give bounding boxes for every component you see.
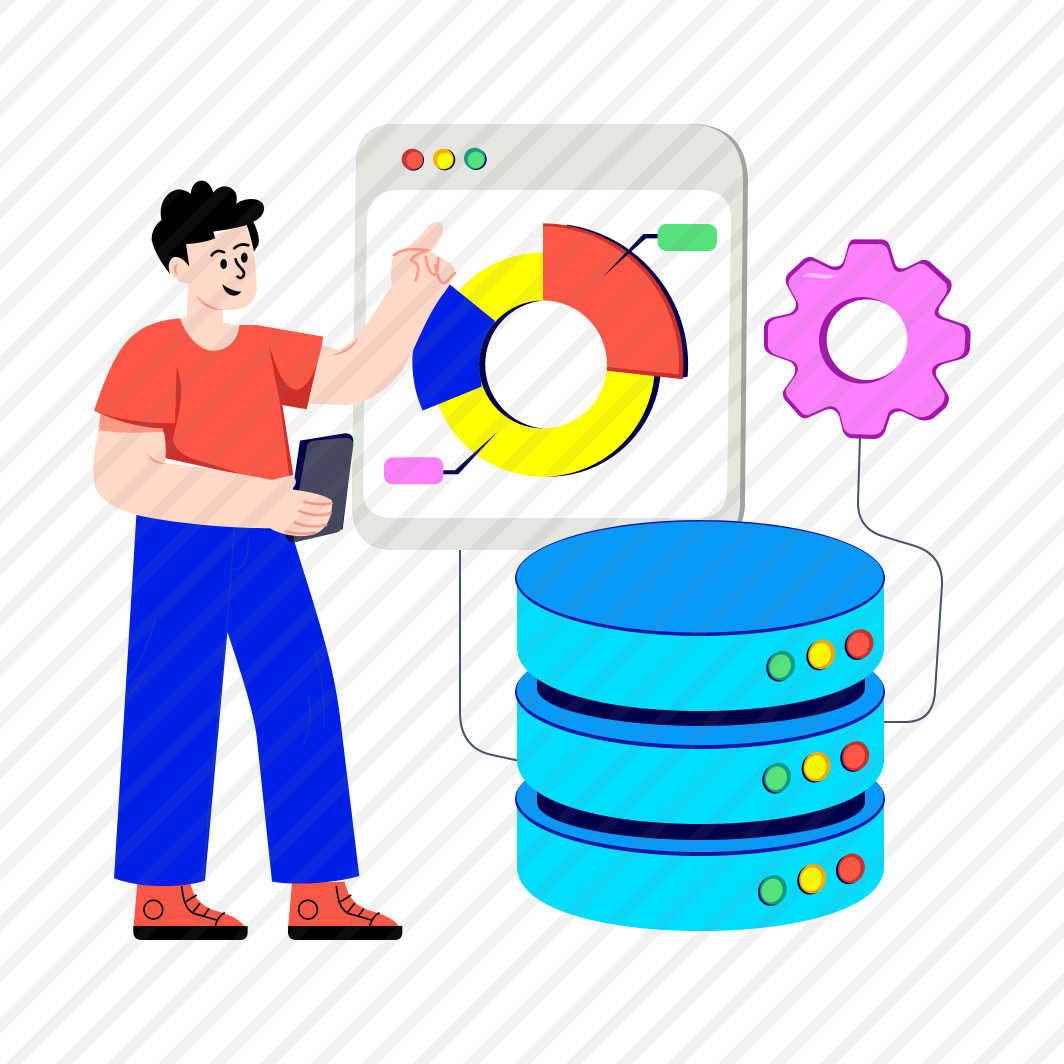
pink label leader [443,432,498,474]
middle tier gap [537,660,865,726]
bottom tier lights [754,849,869,910]
gear rim [764,239,971,439]
under-sleeve shade [98,412,167,434]
pants seams and creases [128,528,324,877]
server lights [754,625,878,910]
green label leader [603,234,658,277]
top tier top [516,522,884,632]
shirt shadow right [269,337,323,476]
top tier lights [762,625,878,686]
middle tier lights [758,737,873,798]
neck and face [168,225,257,351]
right shoe [288,882,402,940]
top tier rim [515,520,885,636]
neck shadow [196,295,223,310]
lower arm and hand [93,430,332,536]
face: brows, eyes, nose, mouth [212,244,248,296]
gear hole [827,299,907,380]
window frame [352,124,743,550]
gear highlight [802,273,838,278]
hair [152,181,264,275]
ear detail [174,263,178,276]
window content area [363,190,731,518]
icon: gear [764,239,971,439]
grip finger lines [286,502,332,534]
window shadow [352,124,748,550]
bottom tier rim [515,742,885,856]
bottom tier body [517,798,884,931]
shoes [133,882,402,940]
window buttons [402,148,487,171]
wire: gear to server [858,436,942,722]
green label [658,224,717,251]
wire: window to server [460,548,520,761]
bottom tier top [516,742,884,852]
pink label [384,457,443,484]
person [93,181,455,940]
arm crease [147,453,167,464]
gear hole shade [819,297,906,384]
pants [114,510,359,886]
raised arm [300,222,455,405]
hole [479,300,607,428]
ring shadow [437,253,661,477]
yellow ring [431,253,655,477]
red wedge face [543,226,679,374]
middle tier body [517,691,884,824]
left shoe [133,882,248,940]
top tier body [517,577,884,711]
middle tier rim [515,635,885,749]
pants shape [114,510,359,886]
panel: browser window [352,124,748,550]
t-shirt [94,318,323,480]
donut chart [384,223,717,484]
bottom tier gap [537,770,865,840]
shirt shadow left [94,367,247,476]
gear face [768,244,965,435]
middle tier top [516,635,884,745]
elbow crease [331,337,358,356]
hole edge crescent [479,300,543,428]
server stack [515,520,885,931]
red wedge shadow [567,225,688,378]
tablet [286,433,353,543]
upper body [93,181,455,543]
pointing hand finger lines [394,249,455,283]
blue wedge [412,284,495,411]
red wedge rim [543,223,683,379]
